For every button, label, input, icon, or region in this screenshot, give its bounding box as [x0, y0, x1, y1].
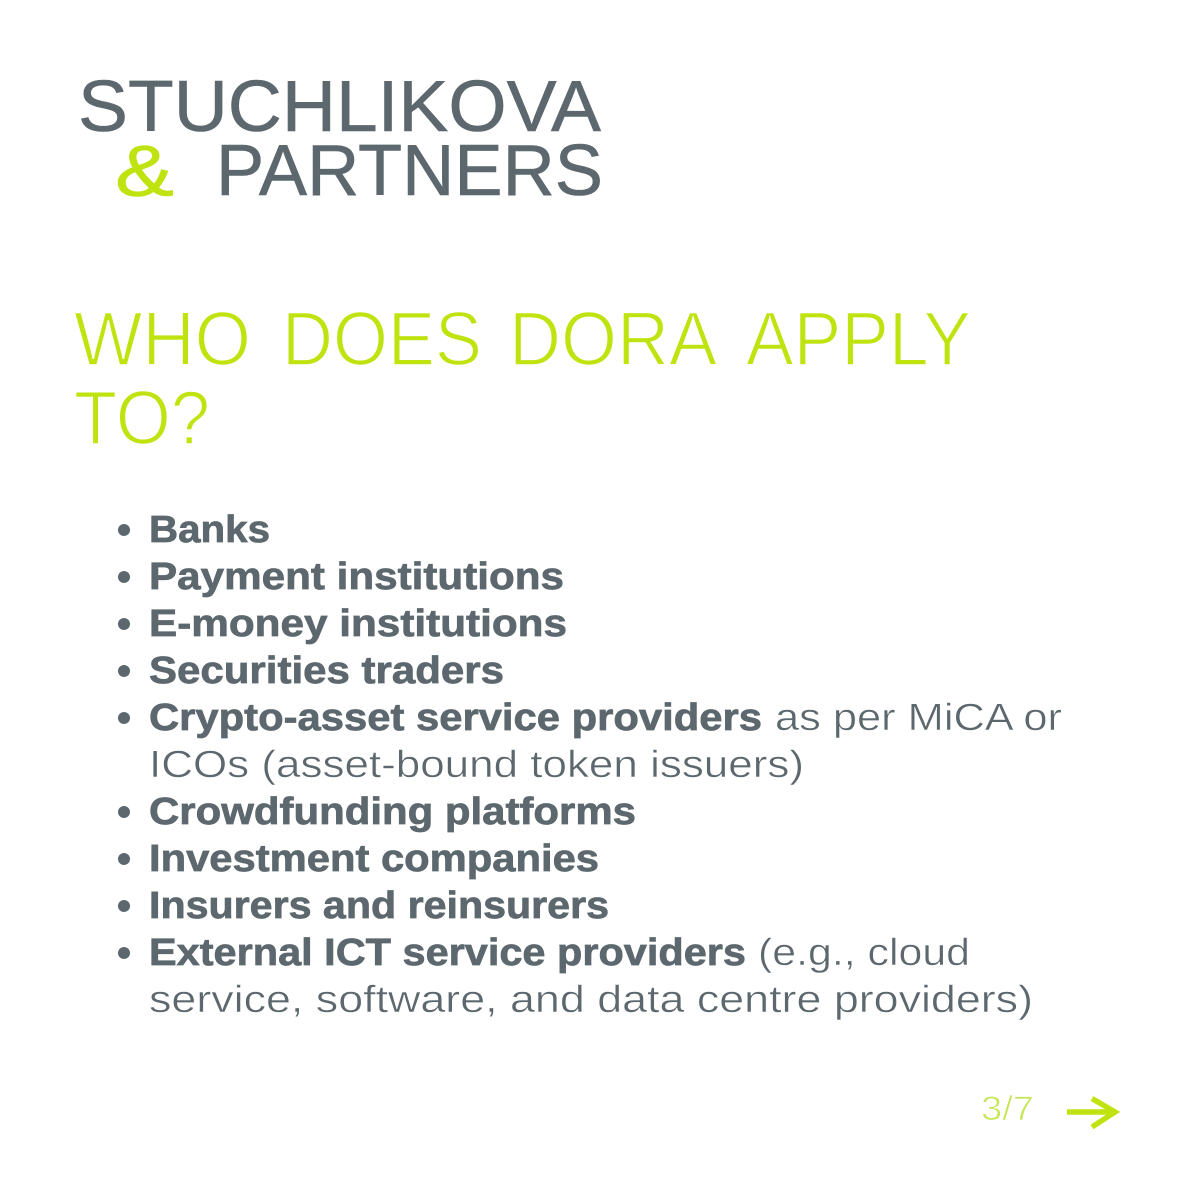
item: crypto-asset service providers: Crypto-asset service providers: [149, 697, 762, 739]
icon: arrow: [1067, 1098, 1115, 1127]
heading: DOES: [282, 297, 482, 382]
item: payment institutions: Payment institutions: [149, 556, 564, 598]
item: insurers and reinsurers: Insurers and reinsurers: [149, 885, 609, 927]
heading: WHO: [74, 297, 251, 382]
heading: TO?: [74, 376, 210, 461]
item: banks: Banks: [149, 509, 270, 551]
logo: [78, 67, 603, 212]
item: investment companies: Investment companies: [149, 838, 599, 880]
logo: second line: PARTNERS: [216, 131, 603, 211]
item: external ICT service providers: External ICT service providers: [149, 932, 746, 974]
item: securities traders: Securities traders: [149, 650, 504, 692]
item: external ICT service providers: service, software, and data centre providers): [149, 979, 1033, 1021]
heading: DORA: [509, 297, 717, 382]
item: e-money institutions: E-money institutions: [149, 603, 567, 645]
item: external ICT service providers: [118, 932, 1033, 1021]
item: crypto-asset service providers: as per MiCA or: [775, 697, 1062, 739]
bullet list: [118, 509, 1062, 1021]
item: external ICT service providers: (e.g., cloud: [758, 932, 970, 974]
page number: 3/7: [981, 1090, 1034, 1128]
item: crypto-asset service providers: ICOs (asset-bound token issuers): [149, 744, 804, 786]
item: crypto-asset service providers: [118, 697, 1062, 786]
logo: ampersand: &: [115, 132, 174, 212]
heading: APPLY: [746, 297, 971, 382]
logo: first line: STUCHLIKOVA: [78, 67, 601, 147]
heading: [74, 297, 971, 461]
item: crowdfunding platforms: Crowdfunding platforms: [149, 791, 636, 833]
